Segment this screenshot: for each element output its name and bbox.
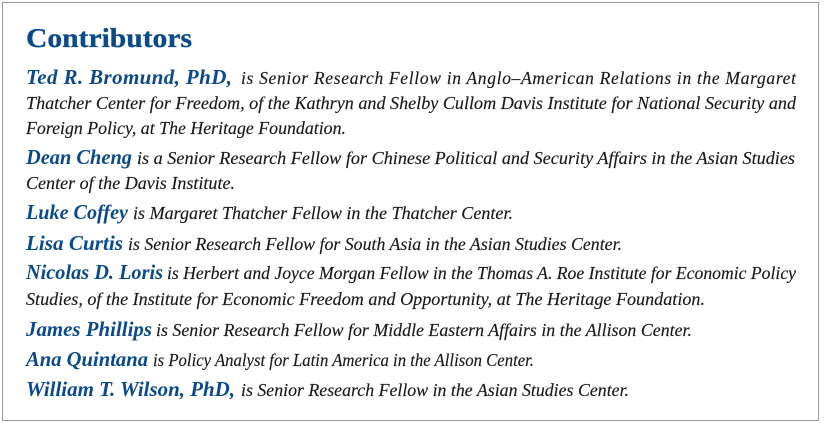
entry: Dean Cheng [25,145,795,193]
entry: Ana Quintana [24,347,534,371]
entry: Nicolas D. Loris: Studies, of the Institute for Economic Freedom and Opportunity, at The Heritage Foundation. [26,289,705,309]
entry: Nicolas D. Loris: is Herbert and Joyce Morgan Fellow in the Thomas A. Roe Institute for Economic Policy [167,263,796,283]
entry: James Phillips: is Senior Research Fellow for Middle Eastern Affairs in the Allison Center. [156,320,692,340]
entry: Lisa Curtis [25,231,622,255]
entry: Lisa Curtis: is Senior Research Fellow for South Asia in the Asian Studies Center. [128,234,622,254]
entry: Ted R. Bromund [25,65,797,138]
entry: Dean Cheng: Dean Cheng [25,145,132,169]
entry: Nicolas D. Loris: Nicolas D. Loris [25,260,163,284]
entry: Ted R. Bromund: Thatcher Center for Freedom, of the Kathryn and Shelby Cullom Davis Institute for National Security and [26,93,796,113]
entry: Ted R. Bromund: is Senior Research Fellow in Anglo–American Relations in the Margaret [241,68,797,88]
entry: Luke Coffey: is Margaret Thatcher Fellow in the Thatcher Center. [133,203,513,223]
entry: Lisa Curtis: Lisa Curtis [25,231,123,255]
entry: William T. Wilson: William T. Wilson, PhD, [26,377,235,401]
entry: Nicolas D. Loris [25,260,796,309]
entry: Ana Quintana: Ana Quintana [24,347,148,371]
entry: Dean Cheng: Center of the Davis Institute. [26,173,235,193]
entry: William T. Wilson: is Senior Research Fellow in the Asian Studies Center. [241,380,629,400]
entry: Ted R. Bromund: Foreign Policy, at The Heritage Foundation. [25,118,346,138]
entry: Luke Coffey: Luke Coffey [25,200,129,224]
entry: James Phillips: James Phillips [25,317,152,341]
entry: Ana Quintana: is Policy Analyst for Latin America in the Allison Center. [153,350,534,370]
entry: Ted R. Bromund: Ted R. Bromund, PhD, [26,65,232,89]
entry: Dean Cheng: is a Senior Research Fellow for Chinese Political and Security Affairs in the Asian Studies [137,148,795,168]
entry: Luke Coffey [25,200,513,224]
entry: James Phillips [25,317,692,341]
title: Contributors [26,23,192,53]
entry: William T. Wilson [26,377,629,401]
